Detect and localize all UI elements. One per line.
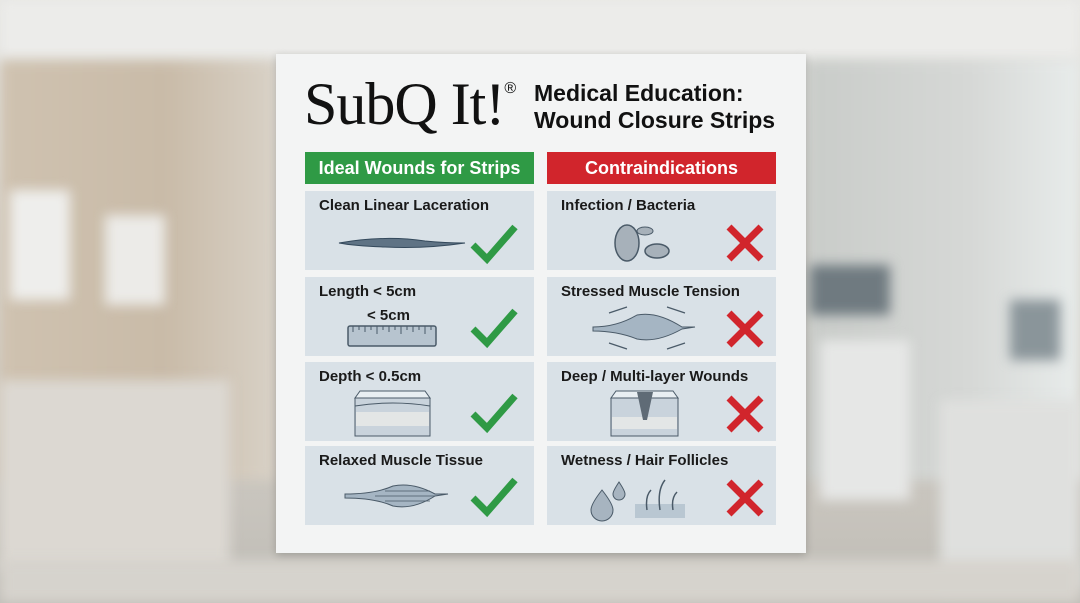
panel: deep wounds: Deep / Multi-layer Wounds bbox=[561, 368, 748, 385]
panel: length: Length < 5cm bbox=[319, 283, 416, 300]
card bbox=[276, 54, 806, 553]
header: ideal bbox=[305, 152, 534, 184]
panel: infection: Infection / Bacteria bbox=[561, 197, 695, 214]
panel: length: < 5cm bbox=[367, 307, 410, 324]
title: Medical Education: bbox=[534, 80, 744, 106]
panel: clean linear laceration bbox=[305, 191, 534, 270]
panel: relaxed muscle: Relaxed Muscle Tissue bbox=[319, 452, 483, 469]
panel: wetness / hair bbox=[547, 446, 776, 525]
panel: deep wounds bbox=[547, 362, 776, 441]
panel: depth bbox=[305, 362, 534, 441]
header: contraindications: Contraindications bbox=[585, 158, 738, 178]
panel: relaxed muscle bbox=[305, 446, 534, 525]
panel: depth: Depth < 0.5cm bbox=[319, 368, 421, 385]
panel: wetness / hair: Wetness / Hair Follicles bbox=[561, 452, 728, 469]
panel: length bbox=[305, 277, 534, 356]
title bbox=[534, 80, 775, 133]
logo: SubQ It!: SubQ It!® bbox=[304, 71, 515, 137]
header: contraindications bbox=[547, 152, 776, 184]
panel: stressed muscle: Stressed Muscle Tension bbox=[561, 283, 740, 300]
title: Wound Closure Strips bbox=[534, 107, 775, 133]
panel: infection bbox=[547, 191, 776, 270]
header: ideal: Ideal Wounds for Strips bbox=[319, 158, 520, 178]
panel: clean linear laceration: Clean Linear Laceration bbox=[319, 197, 489, 214]
panel: stressed muscle bbox=[547, 277, 776, 356]
